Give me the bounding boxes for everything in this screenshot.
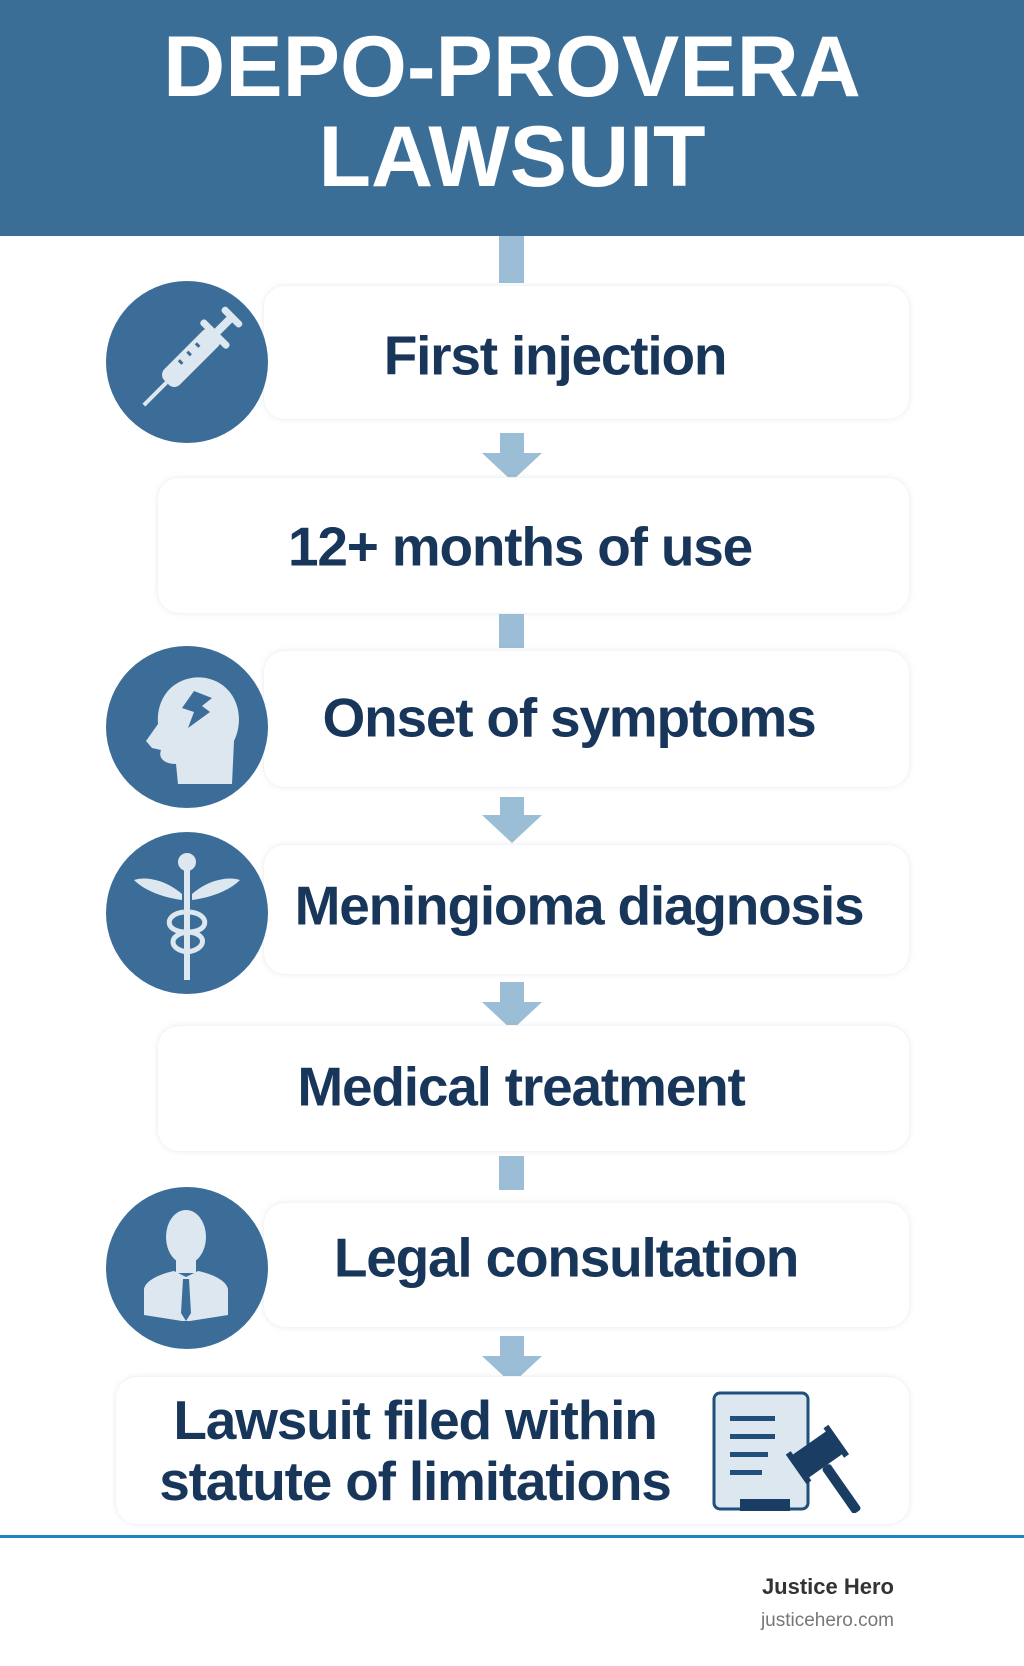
title: LAWSUIT	[319, 109, 705, 205]
step 3 box	[263, 650, 910, 788]
icon: syringe	[106, 281, 268, 443]
title: DEPO-PROVERA	[163, 19, 861, 115]
step 1 text: First injection	[384, 324, 726, 386]
step 7 text: statute of limitations	[159, 1450, 671, 1512]
step 4 box	[263, 844, 910, 975]
arrow 4	[482, 1336, 542, 1376]
connector bar	[499, 614, 524, 648]
step 2 box	[157, 477, 910, 614]
icon: person	[106, 1187, 268, 1349]
title	[163, 19, 861, 205]
footer url: justicehero.com	[761, 1610, 894, 1631]
icon: document and gavel	[712, 1392, 860, 1513]
step 5 text: Medical treatment	[297, 1056, 745, 1118]
step 6 text: Legal consultation	[334, 1226, 798, 1288]
arrow 3	[482, 982, 542, 1025]
step 6 box	[263, 1202, 910, 1328]
step 7 text	[159, 1389, 671, 1512]
icon: caduceus	[106, 832, 268, 994]
step 1 box	[263, 285, 910, 420]
step 2 text: 12+ months of use	[288, 516, 752, 578]
icon: head	[106, 646, 268, 808]
step 3 text: Onset of symptoms	[322, 686, 816, 748]
step 7 box	[115, 1376, 910, 1525]
footer brand: Justice Hero	[762, 1574, 894, 1599]
connector bar	[499, 236, 524, 283]
bottom rule	[0, 1535, 1024, 1538]
arrow 2	[482, 797, 542, 843]
step 5 box	[157, 1025, 910, 1152]
header banner	[0, 0, 1024, 236]
step 7 text: Lawsuit filed within	[173, 1389, 657, 1451]
connector bar	[499, 1156, 524, 1190]
step 4 text: Meningioma diagnosis	[295, 874, 863, 936]
arrow 1	[482, 433, 542, 477]
